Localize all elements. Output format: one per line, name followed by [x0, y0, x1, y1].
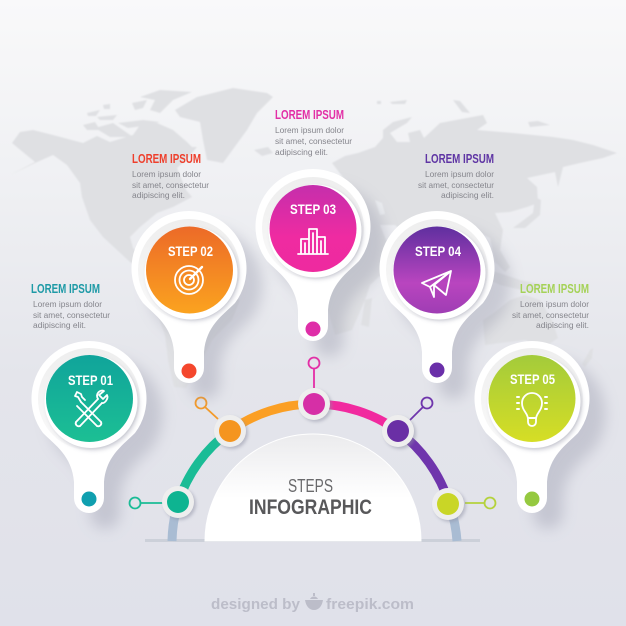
pin shadows — [47, 185, 605, 529]
baseline — [145, 539, 480, 542]
text block: step 05: LOREM IPSUM — [520, 282, 589, 296]
text block: step 05 — [512, 282, 589, 330]
text block: step 04 — [418, 152, 494, 200]
text block: step 03 — [275, 108, 352, 157]
text block: step 02: sit amet, consectetur — [132, 180, 209, 190]
text block: step 05: Lorem ipsum dolor — [520, 299, 589, 309]
text block: step 01: Lorem ipsum dolor — [33, 299, 102, 309]
text block: step 01: sit amet, consectetur — [33, 310, 110, 320]
pin: step 05: STEP 05 — [510, 371, 555, 387]
pin: step 02: STEP 02 — [168, 243, 213, 259]
pin: step 03: STEP 03 — [290, 201, 336, 217]
pin: step 04: STEP 04 — [415, 243, 461, 259]
arc nodes — [162, 388, 466, 522]
pin: step 04 — [380, 211, 494, 383]
text block: step 02: adipiscing elit. — [132, 190, 185, 200]
text block: step 02 — [132, 152, 209, 200]
pin: step 01 — [31, 341, 146, 513]
text block: step 01: adipiscing elit. — [33, 320, 86, 330]
text block: step 04: Lorem ipsum dolor — [425, 169, 494, 179]
title — [249, 475, 372, 519]
pin: step 03 — [256, 169, 370, 341]
text block: step 01: LOREM IPSUM — [31, 282, 100, 296]
text block: step 02: LOREM IPSUM — [132, 152, 201, 166]
footer credit: designed by — [211, 596, 301, 613]
connector rings — [130, 358, 496, 508]
text block: step 04: adipiscing elit. — [441, 190, 494, 200]
text block: step 05: sit amet, consectetur — [512, 310, 589, 320]
semicircle title plate — [205, 434, 421, 541]
map inland seas — [375, 200, 385, 215]
title: STEPS — [288, 475, 333, 496]
text block: step 03: LOREM IPSUM — [275, 108, 344, 122]
text block: step 03: Lorem ipsum dolor — [275, 125, 344, 135]
text block: step 04: sit amet, consectetur — [418, 180, 494, 190]
footer credit: freepik.com — [326, 596, 414, 613]
pin: step 02 — [132, 211, 246, 383]
text block: step 03: adipiscing elit. — [275, 147, 328, 157]
text block: step 04: LOREM IPSUM — [425, 152, 494, 166]
text block: step 05: adipiscing elit. — [536, 320, 589, 330]
pin: step 05 — [474, 341, 590, 513]
text block: step 03: sit amet, consectetur — [275, 136, 352, 146]
arc timeline — [172, 404, 457, 541]
pin: step 01: STEP 01 — [68, 372, 113, 388]
title: INFOGRAPHIC — [249, 496, 372, 519]
text block: step 01 — [31, 282, 110, 330]
footer credit — [211, 593, 414, 613]
text block: step 02: Lorem ipsum dolor — [132, 169, 201, 179]
world map — [10, 88, 617, 388]
